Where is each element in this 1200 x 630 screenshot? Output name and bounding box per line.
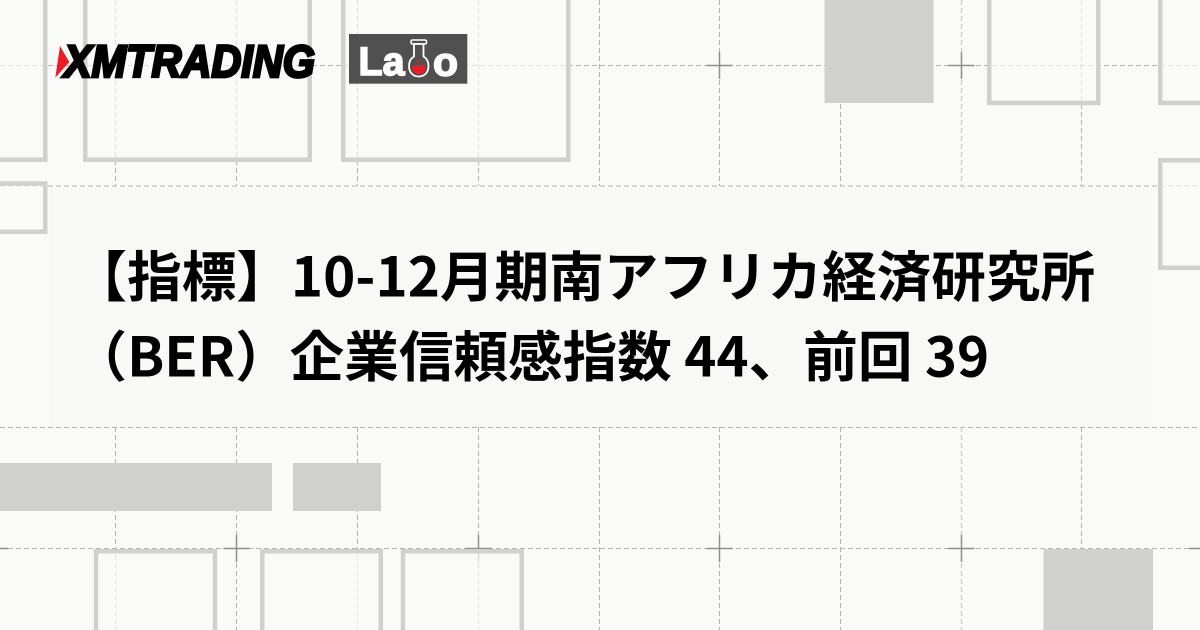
icon: flask [409, 40, 428, 76]
icon: red triangle [55, 46, 69, 78]
solid bar: short [293, 463, 381, 511]
logo letters La: La [358, 40, 405, 84]
logo: XMTRADING [55, 36, 315, 87]
title line 2: （BER）企業信頼感指数 44、前回 39 [72, 314, 989, 392]
logo background [349, 34, 467, 84]
title [72, 234, 1095, 392]
logo: Lab [349, 34, 467, 84]
logo text: XMTRADING [61, 36, 315, 87]
solid bar: long [0, 463, 272, 511]
solid block: bottom right [1044, 549, 1153, 630]
title line 1: 【指標】10-12月期南アフリカ経済研究所 [72, 234, 1095, 312]
solid block: top [824, 0, 934, 103]
frames: outlined squares top [0, 0, 1200, 268]
logo letter o: o [433, 40, 458, 84]
frames: outlined squares bottom [96, 551, 522, 630]
panel: title background [50, 187, 1152, 427]
